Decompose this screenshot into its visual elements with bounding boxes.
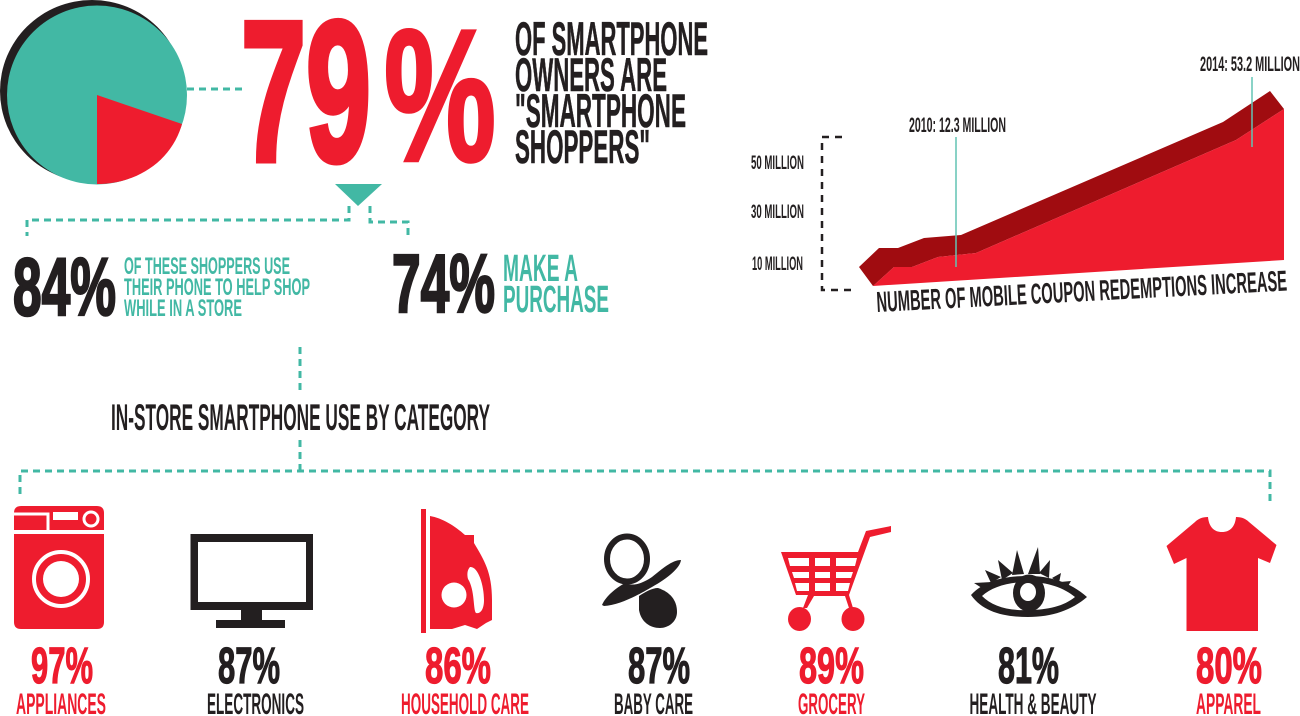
category: health and beauty [970,547,1096,716]
marker line: 2010 [955,137,957,267]
connector: to category heading [298,347,302,395]
value: 81% [998,637,1059,694]
connector: pie to headline [187,88,243,90]
area chart: mobile coupon redemptions [751,53,1300,319]
headline description [515,12,708,173]
axis labels: 50 MILLION [751,153,804,174]
value: 97% [31,637,93,694]
headline description: "SMARTPHONE [515,84,686,137]
triangle pointer [335,184,382,206]
stat description: in store use: OF THESE SHOPPERS USE [124,253,290,280]
category: electronics [190,534,313,716]
icon: pacifier [602,536,681,628]
category connectors [20,440,1270,505]
branch connectors [27,206,408,236]
stat: 84%: 84% [13,242,116,333]
red area [873,109,1284,286]
icon: t-shirt [1166,517,1276,631]
marker line: 2014 [1251,77,1253,147]
infographic canvas: OF SMARTPHONE [515,12,708,65]
value: 87% [628,637,690,694]
category: apparel [1166,517,1276,716]
pie chart: 79 percent [0,0,187,184]
icon: washing machine [14,506,104,629]
stat: 74%: 74% [392,237,495,330]
stat description: purchase [503,248,609,321]
label: 2010: 2010: 12.3 MILLION [909,114,1006,137]
stat description: purchase: MAKE A [503,248,578,290]
dark ribbon [859,91,1284,286]
icon: shopping cart [781,526,891,631]
icon: eye [971,547,1087,617]
axis bracket [822,137,855,290]
area chart: mobile coupon redemptions: 10 MILLION [752,254,803,275]
axis labels: 30 MILLION [751,202,804,223]
stat description: in store use [124,253,310,322]
stat description: in store use: THEIR PHONE TO HELP SHOP [124,274,310,301]
value: 80% [1196,637,1262,694]
axis labels [751,153,804,275]
category: baby care [602,536,693,716]
category: appliances [14,506,106,716]
category: household care [401,509,529,716]
value: 87% [218,637,280,694]
icon: iron [421,509,492,633]
category: grocery [781,526,891,716]
infographic canvas: IN-STORE SMARTPHONE USE BY CATEGORY [111,397,490,438]
headline description: OWNERS ARE [515,48,667,101]
value: 89% [799,637,864,694]
stat description: in store use: WHILE IN A STORE [124,295,242,322]
headline description: SHOPPERS" [515,120,650,173]
icon: television [190,534,313,628]
infographic canvas: PURCHASE [503,279,609,321]
value: 86% [425,637,491,694]
